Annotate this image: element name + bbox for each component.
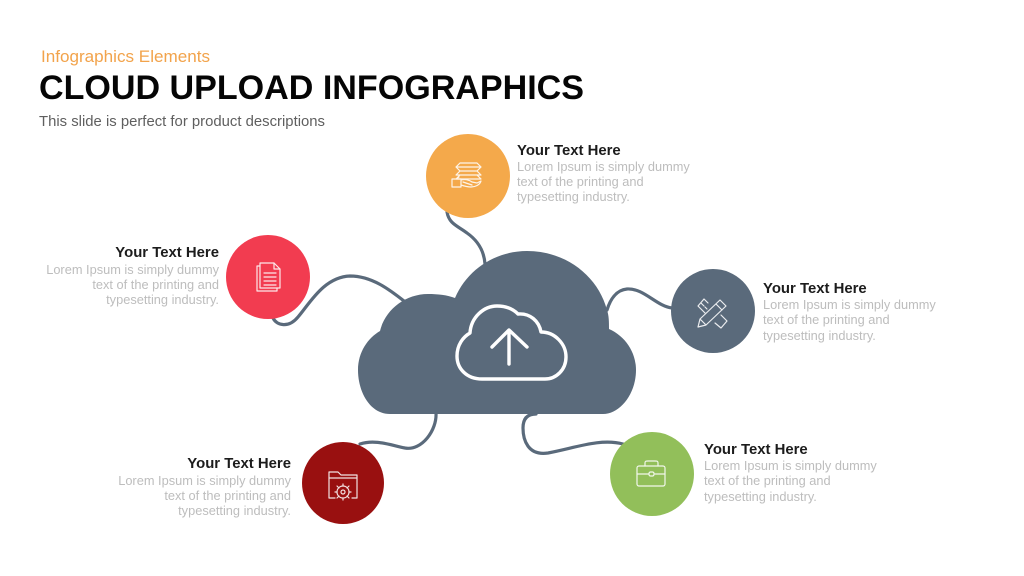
- icon: pencil and ruler: [698, 299, 727, 328]
- text: lower left dark red: typesetting industry.: [178, 503, 291, 518]
- text: lower right green: text of the printing and: [704, 473, 831, 488]
- node: lower right green: [610, 432, 694, 516]
- subtitle: This slide is perfect for product descriptions: [39, 114, 325, 130]
- text: lower right green: typesetting industry.: [704, 489, 817, 504]
- text: left red: text of the printing and: [92, 277, 219, 292]
- text: right slate: [763, 281, 936, 343]
- node: top orange: [426, 134, 510, 218]
- text: right slate: text of the printing and: [763, 312, 890, 327]
- text: lower left dark red: Lorem Ipsum is simply dummy: [118, 473, 292, 488]
- node: left red: [226, 235, 310, 319]
- text: top orange: text of the printing and: [517, 174, 644, 189]
- icon: cloud upload: [457, 306, 566, 379]
- central cloud: [358, 251, 636, 414]
- connector: lower right green: [523, 414, 623, 453]
- text: right slate: typesetting industry.: [763, 328, 876, 343]
- connector: lower left dark red: [360, 413, 436, 448]
- text: lower right green: [704, 442, 877, 504]
- text: top orange: [517, 143, 690, 204]
- text: top orange: Lorem Ipsum is simply dummy: [517, 159, 690, 174]
- connector: right slate: [607, 289, 672, 310]
- text: lower right green: Your Text Here: [704, 442, 808, 458]
- node: right slate: [671, 269, 755, 353]
- connector: top orange: [447, 212, 485, 264]
- icon: hand holding stack: [452, 163, 481, 187]
- text: lower right green: Lorem Ipsum is simply dummy: [704, 458, 877, 473]
- connector: left red: [273, 276, 404, 325]
- text: left red: Lorem Ipsum is simply dummy: [46, 262, 220, 277]
- text: left red: Your Text Here: [115, 245, 219, 261]
- text: top orange: typesetting industry.: [517, 189, 630, 204]
- title: CLOUD UPLOAD INFOGRAPHICS: [39, 69, 584, 107]
- text: lower left dark red: [118, 456, 292, 518]
- text: left red: [46, 245, 220, 307]
- node: lower left dark red: [302, 442, 384, 524]
- text: lower left dark red: text of the printing and: [164, 488, 291, 503]
- icon: documents: [257, 263, 280, 291]
- icon: briefcase: [637, 461, 665, 486]
- eyebrow heading: Infographics Elements: [41, 47, 210, 66]
- icon: folder with gear: [329, 472, 357, 500]
- text: right slate: Your Text Here: [763, 281, 867, 297]
- text: left red: typesetting industry.: [106, 292, 219, 307]
- text: top orange: Your Text Here: [517, 143, 621, 159]
- text: lower left dark red: Your Text Here: [187, 456, 291, 472]
- text: right slate: Lorem Ipsum is simply dummy: [763, 297, 936, 312]
